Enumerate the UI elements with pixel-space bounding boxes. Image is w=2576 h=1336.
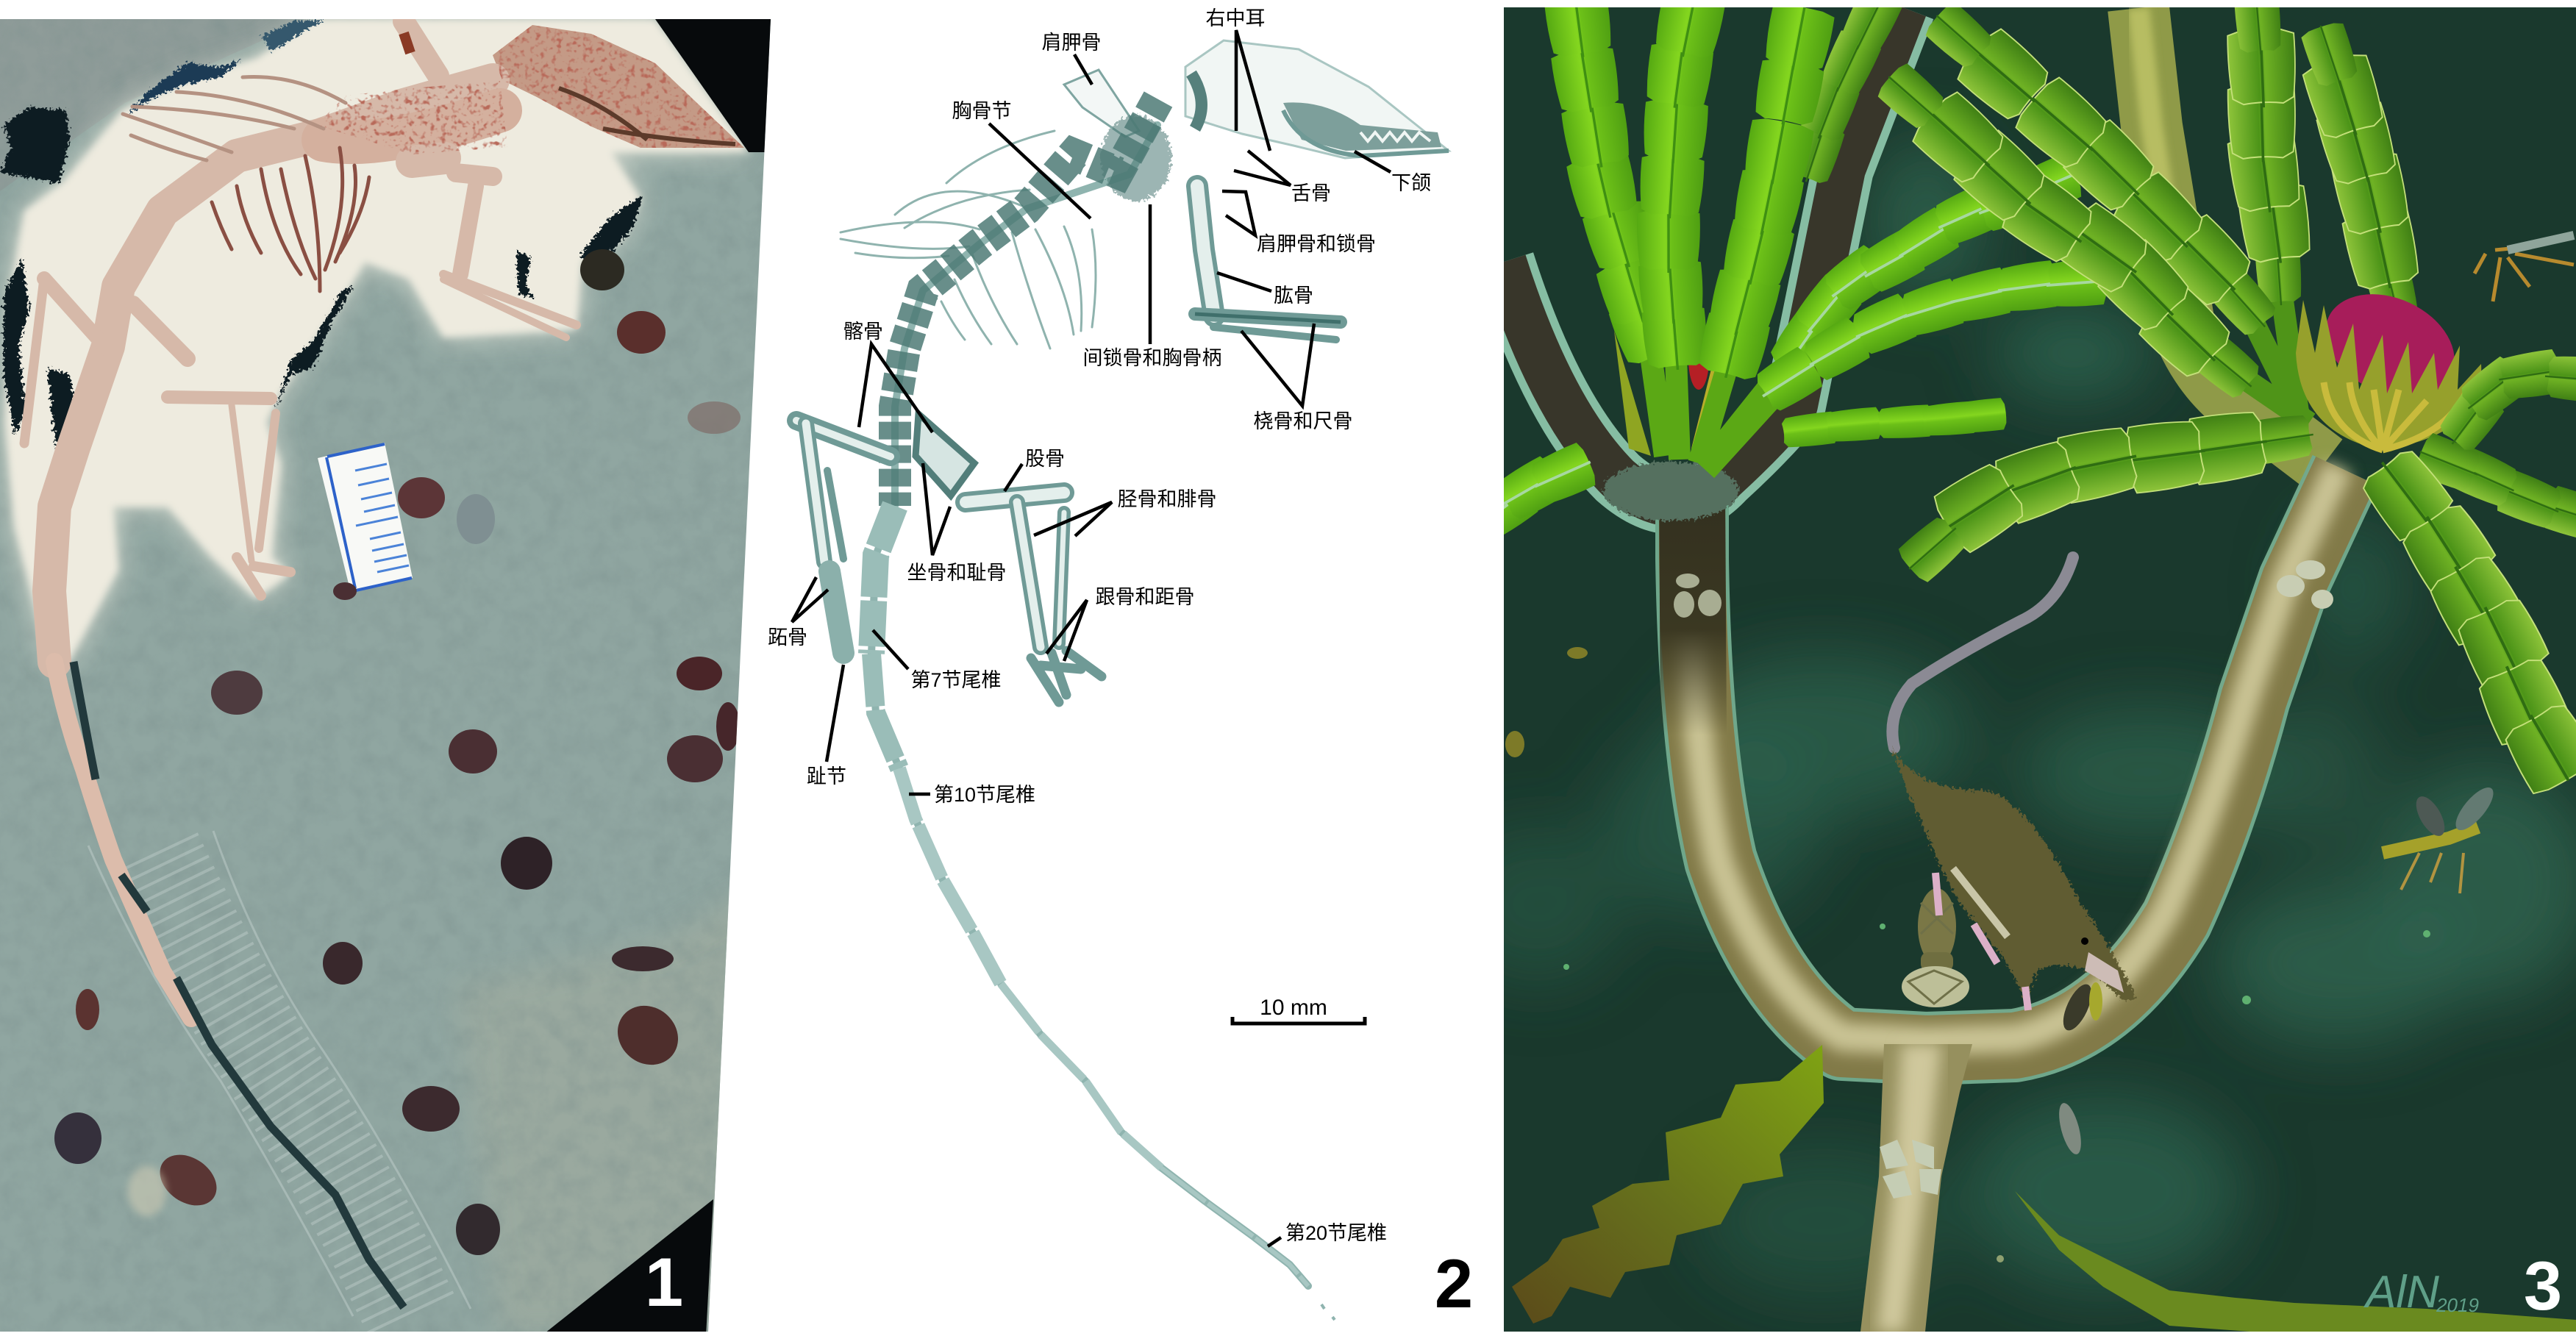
label: 肩胛骨: [1041, 32, 1102, 85]
label: 趾节: 趾节: [807, 765, 846, 787]
main Y trunk: [1690, 467, 2346, 1332]
mouse: body: [1891, 748, 2135, 1010]
flying insect top right: [2475, 235, 2574, 301]
background mottling: [1449, 140, 2576, 1294]
label: 肩胛骨和锁骨: 肩胛骨和锁骨: [1257, 233, 1376, 255]
label: 跖骨: 跖骨: [768, 626, 807, 649]
label: 右中耳: 右中耳: [1206, 7, 1265, 29]
mouse: tail: [1892, 557, 2073, 748]
label: 趾节: [807, 665, 846, 787]
fossil tail: [54, 662, 404, 1307]
black corners: [541, 19, 779, 1336]
fossil tail feather impression: [88, 831, 471, 1316]
bleached cream preparation area: [5, 19, 749, 662]
scapula drawing: [1064, 70, 1139, 137]
signature: [2363, 1267, 2479, 1318]
panel 1: fossil photograph: [0, 19, 779, 1336]
flying insect right: [2383, 782, 2500, 893]
flower, right: magenta bud with yellow-green bracts: [2296, 274, 2481, 450]
label: 肩胛骨: 肩胛骨: [1041, 32, 1102, 54]
label: 桡骨和尺骨: 桡骨和尺骨: [1253, 410, 1353, 432]
right stem node: [2277, 560, 2333, 609]
label: 第10节尾椎: 第10节尾椎: [934, 784, 1035, 806]
flower, left: [1614, 316, 1724, 456]
trunk node scales: [1880, 1140, 1941, 1199]
scale bar: 10 mm: 10 mm: [1260, 996, 1327, 1020]
label: 胸骨节: [952, 100, 1091, 218]
label: 髂骨: [843, 321, 932, 432]
label: 股骨: 股骨: [1025, 448, 1065, 470]
top right stem: [2138, 8, 2324, 464]
label: 舌骨: 舌骨: [1291, 182, 1331, 204]
label: 坐骨和耻骨: 坐骨和耻骨: [907, 562, 1006, 584]
limb bones drawing: [796, 186, 1341, 702]
label: 跖骨: [768, 577, 828, 649]
label: 肱骨: [1217, 273, 1313, 307]
fossil shells: [54, 249, 741, 1255]
fossil speckle: [321, 26, 741, 154]
fallen leaf, bottom right: [2015, 1191, 2576, 1332]
fallen leaf, left: [1512, 1045, 1824, 1324]
label: 第20节尾椎: 第20节尾椎: [1285, 1222, 1387, 1244]
panel 3: life reconstruction: [1449, 7, 2576, 1332]
panel number 2: 2: [1435, 1245, 1473, 1322]
label: 下颌: [1355, 151, 1431, 194]
prey insect in mouth: [2058, 980, 2102, 1035]
label: 跟骨和距骨: [1046, 586, 1194, 661]
far bright specks: [1563, 924, 2430, 1262]
fossil ribs: [123, 76, 369, 291]
spine and tail drawing: [871, 99, 1335, 1320]
signature: AlN: [2363, 1267, 2439, 1318]
label: 肱骨: 肱骨: [1274, 285, 1313, 307]
panel number 3: 3: [2524, 1247, 2562, 1324]
label: 肩胛骨和锁骨: [1222, 191, 1376, 255]
panel 2: skeleton drawing: [768, 7, 1449, 1320]
panel number 1: 1: [645, 1243, 683, 1321]
skull drawing: [1185, 40, 1449, 158]
ribs drawing: [841, 131, 1096, 349]
bleached halo: [5, 19, 749, 662]
fossil skull: [493, 25, 744, 148]
scale paper: [318, 443, 413, 593]
fronds right upper: [1912, 24, 2397, 423]
fronds right lower: [1933, 375, 2576, 748]
label: 髂骨: 髂骨: [843, 321, 883, 343]
label: 第7节尾椎: 第7节尾椎: [910, 669, 1002, 691]
label: 桡骨和尺骨: [1241, 324, 1353, 432]
label: 坐骨和耻骨: [907, 463, 1006, 584]
label: 跟骨和距骨: 跟骨和距骨: [1096, 586, 1194, 608]
stem fork junction: [1603, 462, 1738, 521]
scaly cone on branch: [1902, 888, 1969, 1007]
label: 胸骨节: 胸骨节: [952, 100, 1012, 122]
label: 右中耳: [1206, 7, 1270, 151]
label: 舌骨: [1234, 151, 1331, 204]
falling wing: [2055, 1101, 2086, 1157]
label: 第7节尾椎: [873, 630, 1002, 691]
left stem node: [1674, 574, 1722, 618]
label: 间锁骨和胸骨柄: 间锁骨和胸骨柄: [1082, 347, 1222, 369]
label: 股骨: [1005, 448, 1065, 491]
label: 下颌: 下颌: [1391, 172, 1431, 194]
fronds left: [1504, 21, 2077, 507]
black matrix patches: [0, 21, 643, 463]
left plant stem: [1504, 8, 1905, 504]
label: 胫骨和腓骨: 胫骨和腓骨: [1118, 488, 1216, 510]
fossil body bones: [24, 21, 577, 662]
small insects left: [1505, 647, 1588, 757]
scale bar: 10 mm: [1232, 996, 1365, 1024]
signature: 2019: [2436, 1294, 2479, 1316]
label: 胫骨和腓骨: [1034, 488, 1216, 536]
